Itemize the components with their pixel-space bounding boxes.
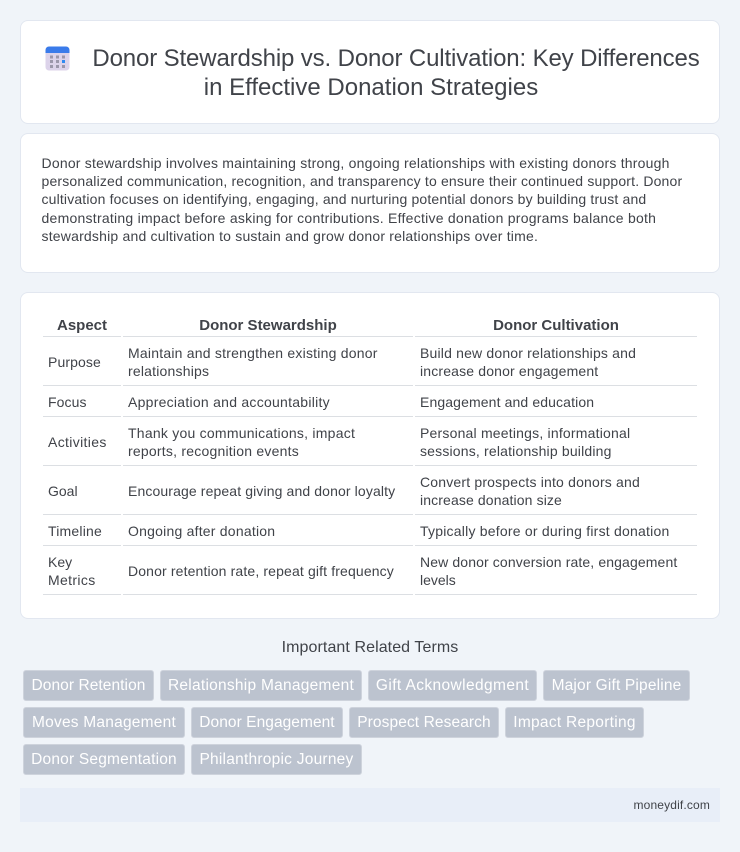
- intro paragraph: Donor stewardship involves maintaining strong, ongoing relationships with existing donors through: [42, 155, 670, 171]
- footer source text: moneydif.com: [634, 798, 710, 812]
- title: [92, 45, 700, 101]
- row: timeline: Ongoing after donation: [128, 523, 275, 539]
- row: focus: Appreciation and accountability: [128, 394, 330, 410]
- row: activities: reports, recognition events: [128, 443, 299, 459]
- row: timeline: Timeline: [48, 523, 102, 539]
- tag: Philanthropic Journey: [199, 751, 354, 768]
- row: key metrics: Donor retention rate, repeat gift frequency: [128, 563, 394, 579]
- tag: [368, 670, 537, 701]
- row: activities: Thank you communications, impact: [128, 425, 355, 441]
- row: key metrics: [43, 554, 697, 595]
- tag: Impact Reporting: [513, 714, 636, 731]
- column headings: [43, 317, 697, 337]
- row: activities: sessions, relationship building: [420, 443, 612, 459]
- row: activities: Activities: [48, 434, 107, 450]
- intro paragraph: cultivation focuses on identifying, engaging, and nurturing potential donors by building trust and: [42, 191, 646, 207]
- title: in Effective Donation Strategies: [204, 74, 538, 101]
- tag: Major Gift Pipeline: [552, 677, 681, 694]
- comparison table: [43, 317, 697, 595]
- tag: [23, 744, 185, 775]
- row: goal: Convert prospects into donors and: [420, 474, 640, 490]
- row: key metrics: Key: [48, 554, 72, 570]
- row: focus: Focus: [48, 394, 87, 410]
- comparison table card: [20, 292, 720, 619]
- row: goal: Encourage repeat giving and donor loyalty: [128, 483, 395, 499]
- title: Donor Stewardship vs. Donor Cultivation: Key Differences: [92, 45, 700, 72]
- row: activities: Personal meetings, informational: [420, 425, 630, 441]
- intro paragraph: personalized communication, recognition, and transparency to ensure their continued support. Donor: [42, 173, 682, 189]
- tag: Donor Segmentation: [31, 751, 177, 768]
- row: timeline: Typically before or during first donation: [420, 523, 669, 539]
- column headings: Donor Cultivation: [493, 317, 619, 334]
- row: focus: [43, 394, 697, 417]
- row: key metrics: New donor conversion rate, engagement: [420, 554, 677, 570]
- row: purpose: [43, 345, 697, 386]
- tag: [191, 744, 362, 775]
- tag: [543, 670, 690, 701]
- related terms tags: [23, 670, 690, 775]
- tag: Donor Retention: [32, 677, 145, 694]
- row: purpose: relationships: [128, 363, 209, 379]
- row: focus: Engagement and education: [420, 394, 594, 410]
- tag: Relationship Management: [168, 677, 354, 694]
- row: purpose: Purpose: [48, 354, 101, 370]
- tag: [505, 707, 644, 738]
- tag: [23, 707, 185, 738]
- header card: [20, 20, 720, 124]
- column headings: Donor Stewardship: [199, 317, 337, 334]
- row: goal: Goal: [48, 483, 78, 499]
- intro text card: [20, 133, 720, 273]
- row: goal: increase donation size: [420, 492, 562, 508]
- tag: Gift Acknowledgment: [376, 677, 529, 694]
- tag: Donor Engagement: [199, 714, 335, 731]
- row: goal: [43, 474, 697, 515]
- row: key metrics: Metrics: [48, 572, 96, 588]
- row: activities: [43, 425, 697, 466]
- intro paragraph: [42, 155, 682, 244]
- tag: [160, 670, 362, 701]
- row: timeline: [43, 523, 697, 546]
- tag: [23, 670, 154, 701]
- row: purpose: increase donor engagement: [420, 363, 598, 379]
- intro paragraph: stewardship and cultivation to sustain and grow donor relationships over time.: [42, 228, 538, 244]
- row: purpose: Build new donor relationships and: [420, 345, 636, 361]
- row: key metrics: levels: [420, 572, 456, 588]
- intro paragraph: demonstrating impact before asking for contributions. Effective donation programs balance both: [42, 210, 656, 226]
- tag: Prospect Research: [357, 714, 491, 731]
- icon: calendar: [46, 46, 70, 70]
- tag: [191, 707, 343, 738]
- row: purpose: Maintain and strengthen existing donor: [128, 345, 378, 361]
- tag: [349, 707, 499, 738]
- related terms heading: Important Related Terms: [282, 639, 458, 656]
- footer bar: [20, 788, 720, 822]
- tag: Moves Management: [32, 714, 176, 731]
- column headings: Aspect: [57, 317, 107, 334]
